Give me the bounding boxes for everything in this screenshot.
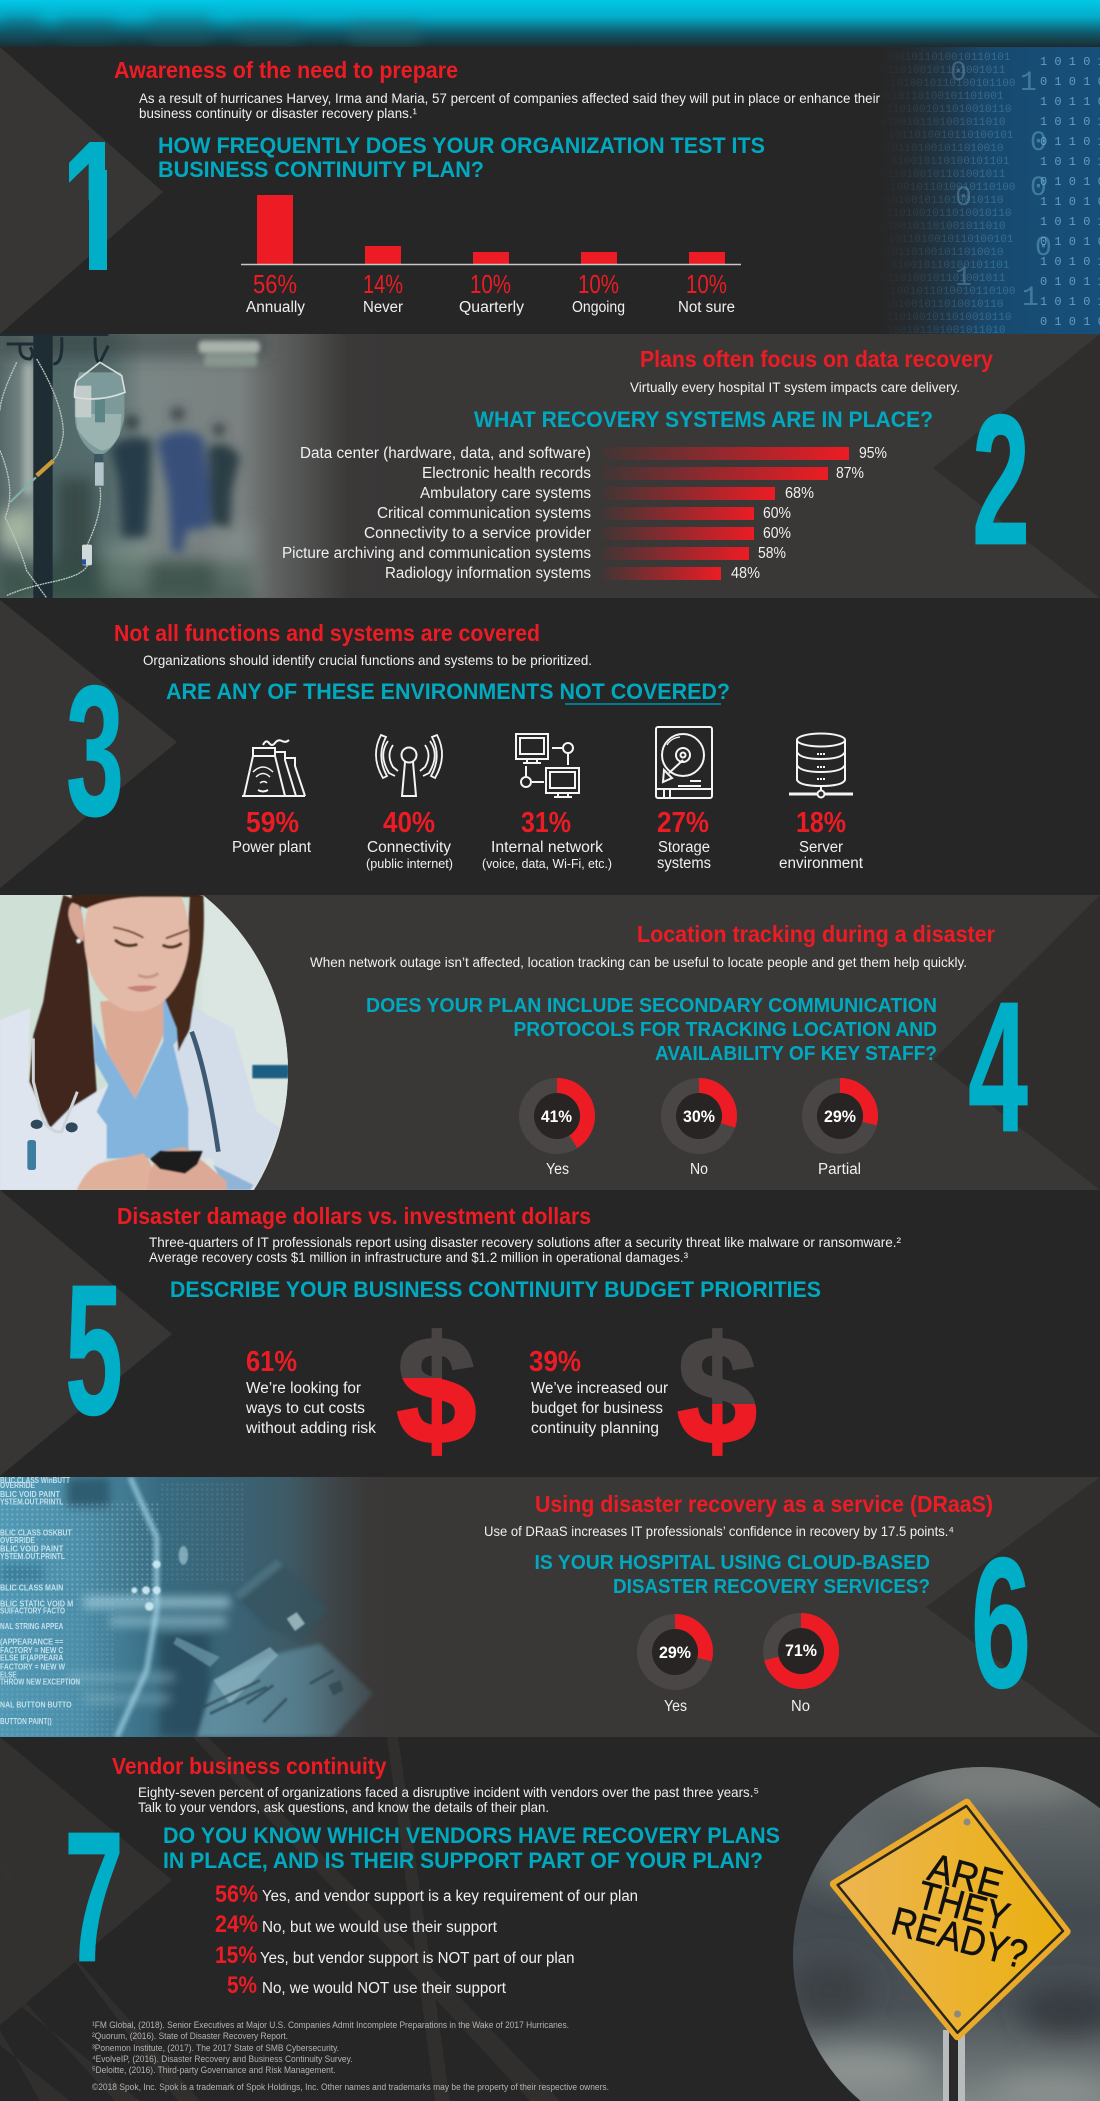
- icon: power plant: [242, 740, 305, 796]
- question heading: IS YOUR HOSPITAL USING CLOUD-BASED: [534, 1551, 930, 1574]
- image: binary code: 0101001011010010110: [878, 195, 1003, 207]
- image: binary code: 1010010110100101100: [890, 78, 1015, 90]
- heading: Awareness of the need to prepare: [114, 57, 458, 83]
- image: circuit board: SUIFACTORY FACTO: [0, 1606, 65, 1616]
- IV bag: [75, 362, 125, 565]
- text block: [138, 1784, 759, 1815]
- panel: section 3 environments: [0, 598, 1100, 895]
- figures: [110, 407, 240, 554]
- horizontal bar chart: Radiology information systems: [385, 565, 591, 582]
- question heading: [366, 994, 937, 1065]
- image: binary code: 0: [1030, 128, 1047, 159]
- image: circuit board: FACTORY = NEW W: [0, 1662, 65, 1672]
- text block: Talk to your vendors, ask questions, and know the details of their plan.: [138, 1799, 549, 1815]
- footnotes: ³Ponemon Institute, (2017). The 2017 State of SMB Cybersecurity.: [92, 2043, 339, 2054]
- image: circuit board: BLIC STATIC VOID M: [0, 1598, 73, 1608]
- image: binary code: 1101001011010010110: [886, 104, 1011, 116]
- image: circuit board: (APPEARANCE ==: [0, 1637, 63, 1647]
- bar chart: 10%: [470, 269, 511, 299]
- icon: dollar 61%: $: [397, 1306, 476, 1476]
- stat labels: Storage: [658, 839, 710, 856]
- donut chart: partial 29%: [802, 1078, 878, 1178]
- hair: [29, 895, 97, 1128]
- image: storm clouds with road sign: [780, 1758, 1100, 2101]
- bar chart: 14%: [363, 269, 403, 299]
- stat labels: 59%: [246, 807, 299, 839]
- image: binary code: 1010010110100101101: [884, 260, 1010, 272]
- text block: Average recovery costs $1 million in infrastructure and $1.2 million in operational damages.³: [149, 1249, 688, 1265]
- text block: [149, 1234, 901, 1265]
- text block: Eighty-seven percent of organizations faced a disruptive incident with vendors over the past three years.⁵: [138, 1784, 759, 1800]
- donut chart: yes 41%: Yes: [546, 1161, 569, 1178]
- donut chart: yes 29%: [637, 1614, 713, 1715]
- question heading: DISASTER RECOVERY SERVICES?: [613, 1575, 930, 1598]
- text block: Use of DRaaS increases IT professionals’ confidence in recovery by 17.5 points.⁴: [484, 1523, 954, 1539]
- horizontal bar chart: 95%: [859, 445, 887, 462]
- image: circuit board: BLIC VOID PAINT: [0, 1543, 63, 1553]
- icon: sign post: [943, 2030, 965, 2101]
- image: binary code: 0: [1030, 173, 1047, 204]
- image: binary code: 1: [955, 263, 972, 294]
- text block: When network outage isn’t affected, location tracking can be useful to locate people and get them help quickly.: [310, 954, 967, 970]
- stat labels: Power plant: [232, 839, 312, 856]
- bar chart: Annually: [246, 299, 305, 316]
- sign text: READY?: [887, 1898, 1032, 1977]
- stat labels: 18%: [796, 807, 846, 839]
- image: binary code: 1011010010110100101: [888, 234, 1014, 246]
- image: circuit board: FACTORY = NEW C: [0, 1645, 63, 1655]
- image: circuit board: OVERRIDE: [0, 1480, 35, 1490]
- image: circuit board: NAL STRING APPEA: [0, 1621, 63, 1631]
- image: binary code: 0100101101001011010: [880, 221, 1005, 233]
- image: circuit board: ELSE IF(APPEARA: [0, 1653, 63, 1663]
- footnotes: ⁵Deloitte, (2016). Third-party Governance and Risk Management.: [92, 2065, 336, 2076]
- text block: business continuity or disaster recovery plans.¹: [139, 105, 417, 121]
- numeral 1: [69, 142, 107, 270]
- stat labels: environment: [779, 855, 864, 872]
- sign text: THEY: [913, 1872, 1014, 1939]
- horizontal bar chart: Picture archiving and communication systems: [282, 545, 591, 562]
- stat: 39%: 39%: [529, 1346, 581, 1378]
- header band: [0, 0, 1100, 47]
- image: binary code: [888, 47, 1100, 334]
- image: binary code: 1: [1022, 283, 1039, 314]
- image: binary code: 1: [1020, 68, 1037, 99]
- stat labels: 27%: [657, 807, 709, 839]
- image: circuit board: [0, 1475, 400, 1737]
- stat: 61%: [245, 1346, 376, 1437]
- heading: Disaster damage dollars vs. investment dollars: [117, 1203, 591, 1229]
- image: doctor with phone: [0, 895, 288, 1190]
- shirt: [93, 993, 188, 1158]
- panel: section 2 recovery systems: [0, 327, 1100, 604]
- circuit details: [197, 1644, 373, 1737]
- question heading: [534, 1551, 930, 1598]
- stat labels: 31%: [521, 807, 571, 839]
- image: binary code: 0110100101101001011: [880, 273, 1006, 285]
- stat labels: Server: [799, 839, 843, 856]
- question heading: IN PLACE, AND IS THEIR SUPPORT PART OF YOUR PLAN?: [163, 1848, 763, 1873]
- donut chart: partial 29%: Partial: [818, 1161, 861, 1178]
- image: circuit board: BUTTON PAINT(): [0, 1716, 52, 1726]
- stat labels: (voice, data, Wi-Fi, etc.): [482, 857, 612, 871]
- horizontal bar chart: 60%: [763, 505, 791, 522]
- image: binary code: 1010010110100101101: [884, 156, 1010, 168]
- IV tubes: [0, 359, 101, 598]
- image: circuit board: BLIC CLASS OSKBUT: [0, 1528, 72, 1538]
- numeral 7: 7: [64, 1793, 124, 2001]
- image: circuit board: YSTEM.OUT.PRINTL: [0, 1551, 65, 1561]
- image: circuit board: OVERRIDE: [0, 1535, 35, 1545]
- image: binary code: 1001011010010110100: [890, 286, 1015, 298]
- text block: [139, 90, 880, 121]
- response list: 56%: [215, 1881, 258, 1908]
- image: binary code: 0101101001011010010: [878, 247, 1003, 259]
- icon: antenna: [376, 735, 442, 796]
- sign text: [892, 1855, 1028, 1967]
- footnotes: ¹FM Global, (2018). Senior Executives at Major U.S. Companies Admit Incomplete Preparations in the Wake of 2017 Hurricanes.: [92, 2020, 569, 2031]
- panel: section 1 awareness: [0, 47, 1100, 337]
- panel: section 5 budget: [0, 1190, 1100, 1477]
- response list: No, but we would use their support: [262, 1919, 498, 1936]
- question heading: HOW FREQUENTLY DOES YOUR ORGANIZATION TEST ITS: [158, 133, 765, 158]
- image: binary code: 1001011010010110100: [890, 182, 1015, 194]
- response list: [215, 1881, 638, 1999]
- heading: Using disaster recovery as a service (DRaaS): [535, 1491, 993, 1517]
- text block: As a result of hurricanes Harvey, Irma and Maria, 57 percent of companies affected said they will put in place or enhance their: [139, 90, 880, 106]
- numeral 4: 4: [968, 963, 1028, 1171]
- panel: section 6 DRaaS: [0, 1475, 1100, 1737]
- footnotes: ²Quorum, (2016). State of Disaster Recovery Report.: [92, 2031, 288, 2042]
- panel: section 7 vendors: [0, 1737, 1100, 2101]
- stat: 61%: We’re looking for: [246, 1380, 361, 1397]
- response list: 24%: [215, 1911, 258, 1938]
- image: binary code: 0101001011010010110: [878, 299, 1003, 311]
- response list: Yes, but vendor support is NOT part of our plan: [260, 1950, 574, 1967]
- numeral 5: 5: [65, 1246, 123, 1453]
- bar chart: 10%: [686, 269, 727, 299]
- IV pole: [0, 334, 108, 598]
- image: circuit board: NAL BUTTON BUTTO: [0, 1699, 72, 1709]
- bar chart: Quarterly: [459, 299, 524, 316]
- donut chart: yes 29%: 29%: [659, 1644, 691, 1662]
- question heading: ARE ANY OF THESE ENVIRONMENTS NOT COVERED?: [166, 679, 730, 704]
- horizontal bar chart: 48%: [731, 565, 760, 582]
- bar chart: [241, 195, 741, 316]
- text block: Three-quarters of IT professionals report using disaster recovery solutions after a security threat like malware or ransomware.²: [149, 1234, 901, 1250]
- image: binary code: 1101001011010010110: [886, 312, 1011, 324]
- response list: No, we would NOT use their support: [262, 1980, 507, 1997]
- question heading: PROTOCOLS FOR TRACKING LOCATION AND: [514, 1018, 937, 1041]
- horizontal bar chart: Critical communication systems: [377, 505, 591, 522]
- horizontal bar chart: Electronic health records: [422, 465, 591, 482]
- image: binary code: 1011010010110100101: [888, 130, 1014, 142]
- icon: warning sign: [834, 1803, 1067, 2036]
- image: hospital corridor: [0, 327, 400, 604]
- donut chart: yes 41%: 41%: [541, 1108, 572, 1126]
- heading: Location tracking during a disaster: [637, 921, 995, 947]
- donut chart: no 30%: No: [690, 1161, 708, 1178]
- face: [83, 896, 191, 1012]
- horizontal bar chart: 87%: [836, 465, 864, 482]
- horizontal bar chart: Data center (hardware, data, and software): [300, 445, 591, 462]
- heading: Plans often focus on data recovery: [640, 346, 993, 372]
- image: binary code: 1101001011010010110: [886, 208, 1011, 220]
- text block: Organizations should identify crucial functions and systems to be prioritized.: [143, 652, 592, 668]
- stat: 39%: budget for business: [531, 1400, 663, 1417]
- image: binary code: 0100101101001011010: [880, 117, 1005, 129]
- donut chart: yes 41%: [519, 1078, 595, 1178]
- icon: dollar 39%: $: [677, 1306, 757, 1476]
- donut chart: no 71%: 71%: [785, 1642, 817, 1660]
- horizontal bar chart: Connectivity to a service provider: [364, 525, 591, 542]
- image: circuit board: BLIC CLASS MAIN: [0, 1582, 63, 1592]
- neck: [100, 995, 165, 1099]
- icon: server: [789, 734, 853, 798]
- stat: 61%: ways to cut costs: [245, 1400, 365, 1417]
- image: binary code: 0100101101001011010: [880, 325, 1005, 337]
- donut chart: no 71%: [763, 1613, 839, 1715]
- footnotes: [92, 2020, 609, 2093]
- bar chart: 10%: [578, 269, 619, 299]
- question heading: DO YOU KNOW WHICH VENDORS HAVE RECOVERY PLANS: [163, 1823, 780, 1848]
- stat labels: Connectivity: [367, 839, 451, 856]
- image: binary code: 0: [955, 183, 972, 214]
- image: binary code: 0: [1035, 233, 1052, 264]
- footnotes: ©2018 Spok, Inc. Spok is a trademark of Spok Holdings, Inc. Other names and trademarks may be the property of their respective owners.: [92, 2082, 609, 2093]
- image: circuit board: THROW NEW EXCEPTION: [0, 1677, 80, 1687]
- response list: 15%: [215, 1942, 257, 1969]
- image: circuit board: YSTEM.OUT.PRINTL: [0, 1497, 63, 1507]
- numeral 3: 3: [66, 647, 124, 854]
- donut chart: no 30%: 30%: [683, 1108, 715, 1126]
- question heading: AVAILABILITY OF KEY STAFF?: [655, 1042, 937, 1065]
- horizontal bar chart: 58%: [758, 545, 786, 562]
- horizontal bar chart: 60%: [763, 525, 791, 542]
- image: binary code: 0110100101101001011: [880, 65, 1006, 77]
- donut chart: no 30%: [661, 1078, 737, 1178]
- bar chart: 56%: [253, 269, 297, 299]
- donut chart: no 71%: No: [791, 1698, 810, 1715]
- stat labels: (public internet): [366, 857, 453, 871]
- question heading: WHAT RECOVERY SYSTEMS ARE IN PLACE?: [474, 407, 933, 432]
- panel: section 4 location tracking: [0, 895, 1100, 1190]
- footnotes: ⁴EvolveIP, (2016). Disaster Recovery and Business Continuity Survey.: [92, 2054, 352, 2065]
- question heading: [163, 1823, 780, 1873]
- horizontal bar chart: Ambulatory care systems: [420, 485, 591, 502]
- image: binary code: 0110100101101001011: [880, 169, 1006, 181]
- numeral 1: 1: [61, 103, 127, 310]
- bar chart: Ongoing: [572, 299, 625, 316]
- image: circuit board: BLIC CLASS WinBUTT: [0, 1475, 70, 1485]
- question heading: DESCRIBE YOUR BUSINESS CONTINUITY BUDGET PRIORITIES: [170, 1277, 821, 1302]
- horizontal bar chart: 68%: [785, 485, 814, 502]
- response list: Yes, and vendor support is a key requirement of our plan: [262, 1888, 638, 1905]
- icon: hard disk: [656, 727, 712, 798]
- heading: Vendor business continuity: [112, 1753, 387, 1779]
- image: binary code: 0: [950, 58, 967, 89]
- numeral 2: 2: [972, 376, 1030, 583]
- donut chart: partial 29%: 29%: [824, 1108, 856, 1126]
- stethoscope: [31, 1032, 218, 1152]
- image: circuit board: ELSE: [0, 1669, 17, 1679]
- hands and phone: [77, 1147, 253, 1190]
- stat: 61%: 61%: [246, 1346, 297, 1378]
- stat: 39%: We’ve increased our: [531, 1380, 668, 1397]
- question heading: BUSINESS CONTINUITY PLAN?: [158, 157, 484, 182]
- stat: 61%: without adding risk: [245, 1420, 376, 1437]
- question heading: [158, 133, 765, 182]
- icon: network: [516, 734, 579, 797]
- stat labels: systems: [657, 855, 711, 872]
- image: circuit board: BLIC VOID PAINT: [0, 1489, 60, 1499]
- stat labels: Internal network: [491, 839, 603, 856]
- bar chart: Never: [363, 299, 403, 316]
- stat: 39%: continuity planning: [531, 1420, 659, 1437]
- stat labels: [232, 807, 864, 872]
- text block: Virtually every hospital IT system impacts care delivery.: [630, 379, 960, 395]
- image: binary code: 0101101001011010010: [878, 143, 1003, 155]
- stat: 39%: [529, 1346, 668, 1437]
- bar chart: Not sure: [678, 299, 735, 316]
- coat: [0, 895, 279, 1190]
- response list: 5%: [227, 1972, 257, 1999]
- question heading: DOES YOUR PLAN INCLUDE SECONDARY COMMUNICATION: [366, 994, 937, 1017]
- numeral 6: 6: [971, 1519, 1031, 1727]
- sign text: ARE: [923, 1845, 1007, 1908]
- heading: Not all functions and systems are covered: [114, 620, 540, 646]
- image: binary code: 1001011010010110101: [885, 52, 1011, 64]
- horizontal bar chart: [282, 445, 887, 582]
- image: binary code: 0010110100101101001: [878, 91, 1004, 103]
- stat labels: 40%: [383, 807, 435, 839]
- donut chart: yes 29%: Yes: [664, 1698, 687, 1715]
